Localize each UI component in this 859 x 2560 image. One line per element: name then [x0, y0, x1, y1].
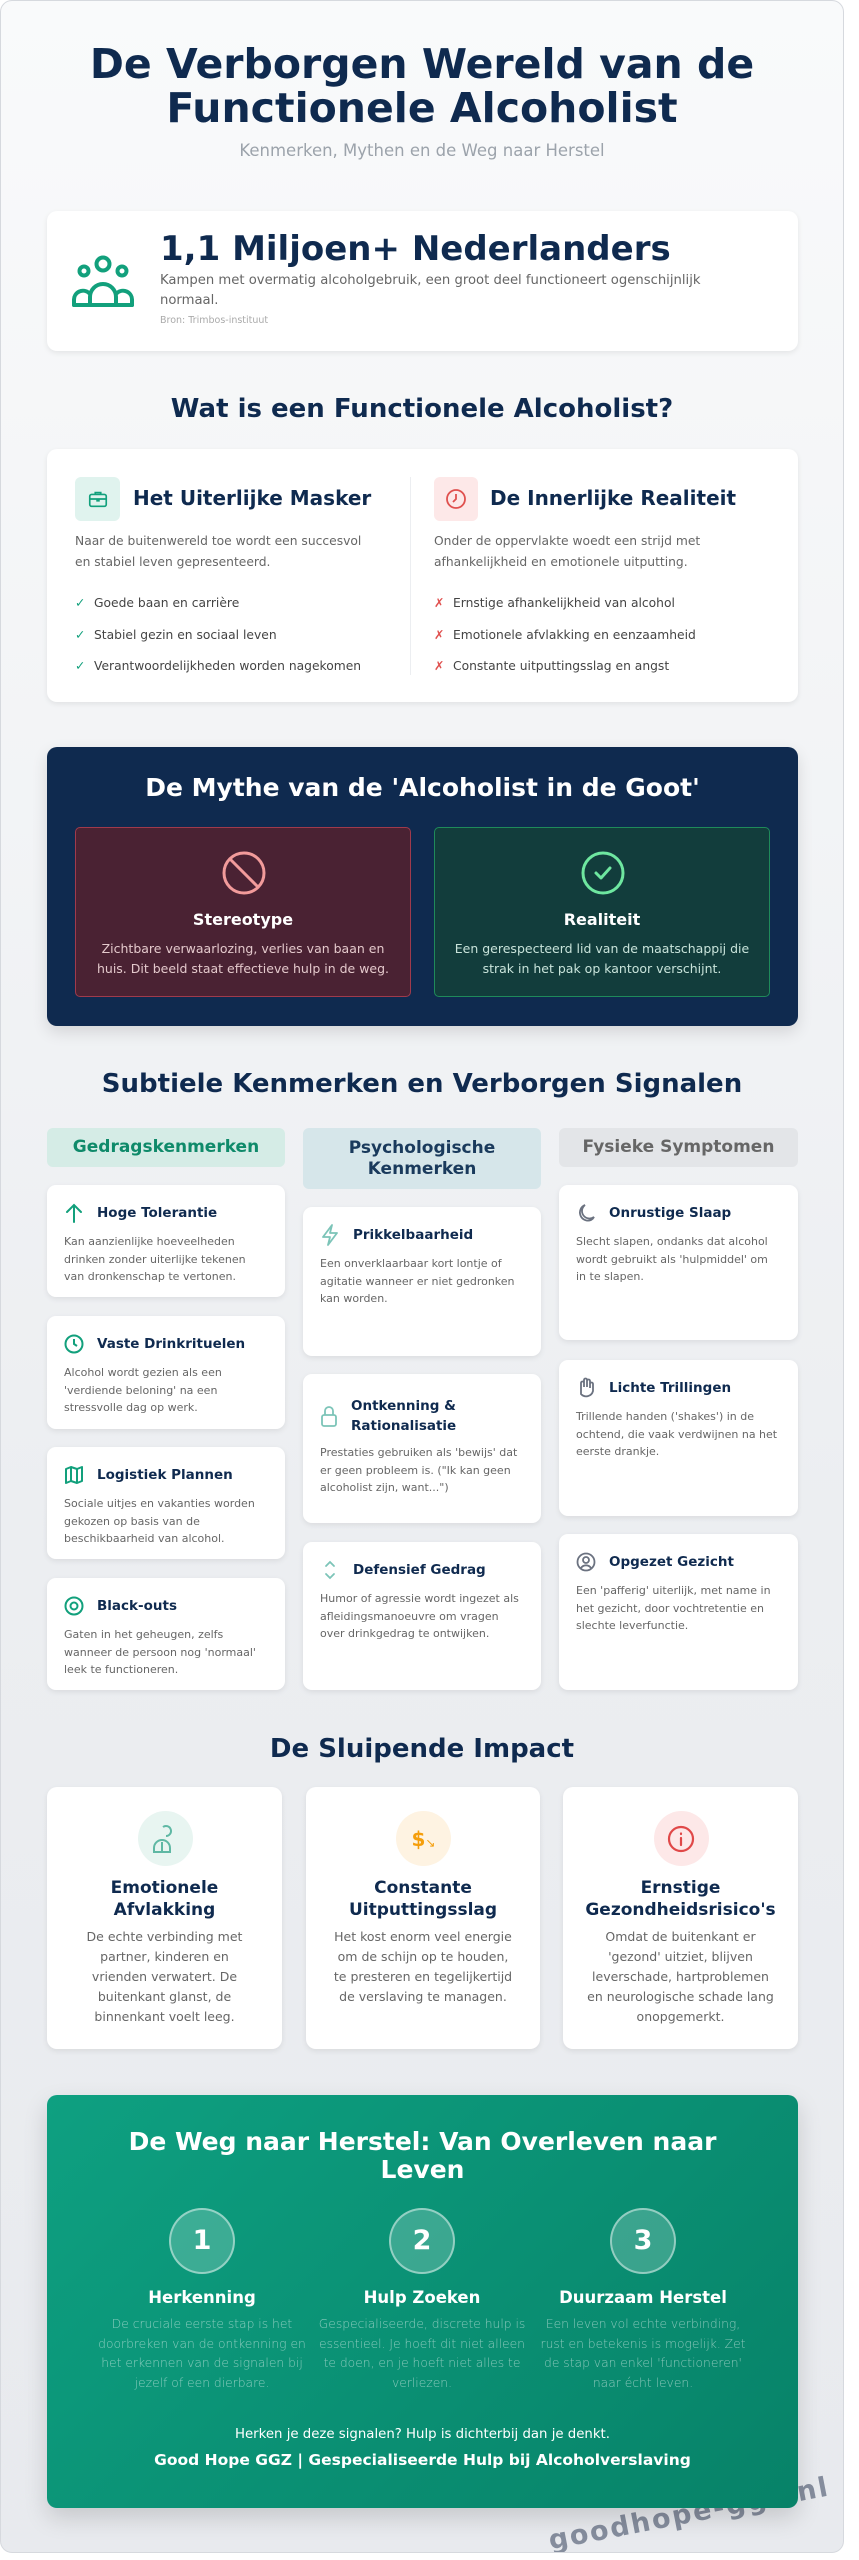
heading: impact: De Sluipende Impact: [270, 1734, 574, 1764]
icon: info: [654, 1811, 708, 1866]
icon: money: ↘: [425, 1836, 435, 1850]
card: onrustige slaap: [559, 1185, 798, 1340]
box: stereotype: [75, 827, 411, 997]
card: prikkelbaarheid: [303, 1207, 541, 1356]
card: emotionele afvlakking: Emotionele: [111, 1878, 218, 1898]
step 2: [319, 2208, 525, 2390]
list: mask: Verantwoordelijkheden worden nagekomen: [94, 659, 361, 673]
card: constante uitputtingsslag: Het kost enorm veel energie om de schijn op te houden, te presteren en tegelijkertijd de verslaving te managen.: [334, 1929, 512, 2004]
callout text: Herken je deze signalen? Hulp is dichterbij dan je denkt.: [235, 2427, 610, 2442]
card: emotionele afvlakking: Afvlakking: [114, 1900, 215, 1920]
box: reality: [434, 827, 770, 997]
card: ontkenning: Rationalisatie: [351, 1418, 456, 1434]
card: logistiek plannen: [47, 1447, 285, 1559]
card: defensief gedrag: Humor of agressie wordt ingezet als afleidingsmanoeuvre om vragen over drinkgedrag te ontwijken.: [320, 1592, 519, 1640]
card: emotionele afvlakking: [47, 1787, 282, 2049]
step 3: 3: [634, 2225, 652, 2256]
step 1: De cruciale eerste stap is het doorbreken van de ontkenning en het erkennen van de signalen bij jezelf of een dierbare.: [98, 2317, 306, 2390]
card: logistiek plannen: Sociale uitjes en vakanties worden gekozen op basis van de beschikbaarheid van alcohol.: [64, 1497, 255, 1545]
icon: person: [138, 1811, 192, 1866]
step 1: 1: [193, 2225, 211, 2256]
list: mask: ✓: [75, 596, 85, 610]
card: vaste drinkrituelen: Vaste Drinkrituelen: [97, 1336, 245, 1352]
box: reality: Een gerespecteerd lid van de maatschappij die strak in het pak op kantoor verschijnt.: [455, 941, 749, 976]
step 3: [541, 2208, 745, 2390]
heading: mask: Het Uiterlijke Masker: [133, 486, 371, 510]
card: lichte trillingen: [559, 1360, 798, 1516]
panel: recovery: [47, 2095, 798, 2508]
step 1: Herkenning: [148, 2288, 256, 2307]
card: gezondheidsrisico's: Ernstige: [641, 1878, 720, 1898]
heading: myth: De Mythe van de 'Alcoholist in de Goot': [145, 773, 700, 802]
icon: group of people: [72, 256, 134, 307]
card: constante uitputtingsslag: Constante: [374, 1878, 472, 1898]
panel: mask vs reality: [47, 449, 798, 702]
list: reality: ✗: [434, 659, 444, 673]
card: prikkelbaarheid: Prikkelbaarheid: [353, 1227, 473, 1243]
source: Bron: Trimbos-instituut: [160, 315, 268, 326]
title: De Verborgen Wereld van de: [90, 40, 754, 88]
subtitle: Kenmerken, Mythen en de Weg naar Herstel: [239, 141, 605, 160]
card: onrustige slaap: Onrustige Slaap: [609, 1205, 731, 1221]
card: lichte trillingen: Lichte Trillingen: [609, 1380, 731, 1396]
heading: signals: Subtiele Kenmerken en Verborgen Signalen: [102, 1069, 742, 1099]
text: reality description: Onder de oppervlakte woedt een strijd met afhankelijkheid en emotionele uitputting.: [434, 534, 700, 568]
list: reality: Ernstige afhankelijkheid van alcohol: [453, 596, 675, 610]
card: opgezet gezicht: [559, 1534, 798, 1690]
panel: statistic: [47, 211, 798, 351]
column header: physical: [559, 1128, 798, 1167]
list: reality: Emotionele afvlakking en eenzaamheid: [453, 628, 696, 642]
step 2: Gespecialiseerde, discrete hulp is essentieel. Je hoeft dit niet alleen te doen, en je hoeft niet alles te verliezen.: [319, 2317, 525, 2390]
column header: behaviour: [47, 1128, 285, 1167]
box: reality: Realiteit: [564, 910, 640, 929]
card: opgezet gezicht: Opgezet Gezicht: [609, 1554, 734, 1570]
stat number: 1,1 Miljoen+ Nederlanders: [160, 229, 671, 269]
card: hoge tolerantie: Kan aanzienlijke hoeveelheden drinken zonder uiterlijke tekenen van dronkenschap te vertonen.: [64, 1235, 246, 1283]
card: emotionele afvlakking: De echte verbinding met partner, kinderen en vrienden verwatert. De buitenkant glanst, de binnenkant voelt leeg.: [87, 1929, 242, 2024]
card: lichte trillingen: Trillende handen ('shakes') in de ochtend, die vaak verdwijnen na het eerste drankje.: [576, 1410, 777, 1458]
column: inner reality: [434, 477, 736, 673]
card: hoge tolerantie: Hoge Tolerantie: [97, 1205, 217, 1221]
icon: money: [396, 1811, 451, 1866]
step 3: Duurzaam Herstel: [559, 2288, 727, 2307]
card: logistiek plannen: Logistiek Plannen: [97, 1467, 233, 1483]
card: black-outs: Gaten in het geheugen, zelfs wanneer de persoon nog 'normaal' leek te functioneren.: [64, 1628, 256, 1676]
card: onrustige slaap: Slecht slapen, ondanks dat alcohol wordt gebruikt als 'hulpmiddel' om in te slapen.: [576, 1235, 768, 1283]
card: prikkelbaarheid: Een onverklaarbaar kort lontje of agitatie wanneer er niet gedronken kan worden.: [320, 1257, 515, 1305]
column: outer mask: [75, 477, 372, 673]
list: mask: [75, 596, 361, 673]
list: mask: ✓: [75, 659, 85, 673]
card: defensief gedrag: Defensief Gedrag: [353, 1562, 486, 1578]
list: mask: ✓: [75, 628, 85, 642]
step 1: [98, 2208, 306, 2390]
card: gezondheidsrisico's: Omdat de buitenkant er 'gezond' uitziet, blijven leverschade, hartproblemen en neurologische schade lang onopgemerkt.: [587, 1929, 774, 2024]
step 3: Een leven vol echte verbinding, rust en betekenis is mogelijk. Zet de stap van enkel 'functioneren' naar écht leven.: [541, 2317, 745, 2390]
column header: psychological: Psychologische: [349, 1138, 495, 1158]
icon: forbidden: [222, 852, 266, 894]
heading: recovery: De Weg naar Herstel: Van Overleven naar Leven: [129, 2127, 716, 2184]
text: mask description: Naar de buitenwereld toe wordt een succesvol en stabiel leven gepresenteerd.: [75, 534, 361, 568]
list: reality: Constante uitputtingsslag en angst: [453, 659, 669, 673]
card: vaste drinkrituelen: Alcohol wordt gezien als een 'verdiende beloning' na een stressvolle dag op werk.: [64, 1366, 222, 1414]
list: mask: Stabiel gezin en sociaal leven: [94, 628, 277, 642]
card: ontkenning: Ontkenning &: [351, 1398, 456, 1414]
card: black-outs: Black-outs: [97, 1598, 177, 1614]
list: reality: [434, 596, 696, 673]
card: ontkenning: [303, 1374, 541, 1523]
box: stereotype: Stereotype: [193, 910, 293, 929]
list: mask: Goede baan en carrière: [94, 596, 239, 610]
stat description: Kampen met overmatig alcoholgebruik, een groot deel functioneert ogenschijnlijk normaal.: [160, 273, 700, 308]
column header: behaviour: Gedragskenmerken: [73, 1137, 259, 1157]
box: stereotype: Zichtbare verwaarlozing, verlies van baan en huis. Dit beeld staat effectieve hulp in de weg.: [97, 941, 389, 976]
card: constante uitputtingsslag: Uitputtingsslag: [349, 1900, 497, 1920]
card: black-outs: [47, 1578, 285, 1690]
card: defensief gedrag: [303, 1542, 541, 1690]
card: vaste drinkrituelen: [47, 1316, 285, 1429]
column header: psychological: [303, 1128, 541, 1189]
title: Functionele Alcoholist: [166, 84, 678, 132]
footer brand: Good Hope GGZ | Gespecialiseerde Hulp bij Alcoholverslaving: [154, 2451, 691, 2469]
list: reality: ✗: [434, 596, 444, 610]
card: constante uitputtingsslag: [306, 1787, 540, 2049]
panel: myth: [47, 747, 798, 1026]
icon: briefcase: [75, 477, 120, 521]
heading: what is: Wat is een Functionele Alcoholist?: [171, 394, 673, 424]
step 2: 2: [413, 2225, 431, 2256]
column header: psychological: Kenmerken: [368, 1158, 476, 1178]
card: hoge tolerantie: [47, 1185, 285, 1297]
card: gezondheidsrisico's: Gezondheidsrisico's: [585, 1900, 776, 1920]
heading: reality: De Innerlijke Realiteit: [490, 486, 736, 510]
steps: [98, 2208, 745, 2390]
title: [90, 40, 754, 132]
icon: money: $: [412, 1826, 425, 1850]
column header: physical: Fysieke Symptomen: [583, 1137, 774, 1157]
card: opgezet gezicht: Een 'pafferig' uiterlijk, met name in het gezicht, door vochtretentie en slechte leverfunctie.: [576, 1584, 771, 1632]
icon: check circle: [582, 852, 624, 894]
list: reality: ✗: [434, 628, 444, 642]
card: gezondheidsrisico's: [563, 1787, 798, 2049]
icon: clock: [434, 477, 478, 521]
step 2: Hulp Zoeken: [364, 2288, 480, 2307]
card: ontkenning: Prestaties gebruiken als 'bewijs' dat er geen probleem is. ("Ik kan geen alcoholist zijn, want..."): [320, 1446, 517, 1494]
